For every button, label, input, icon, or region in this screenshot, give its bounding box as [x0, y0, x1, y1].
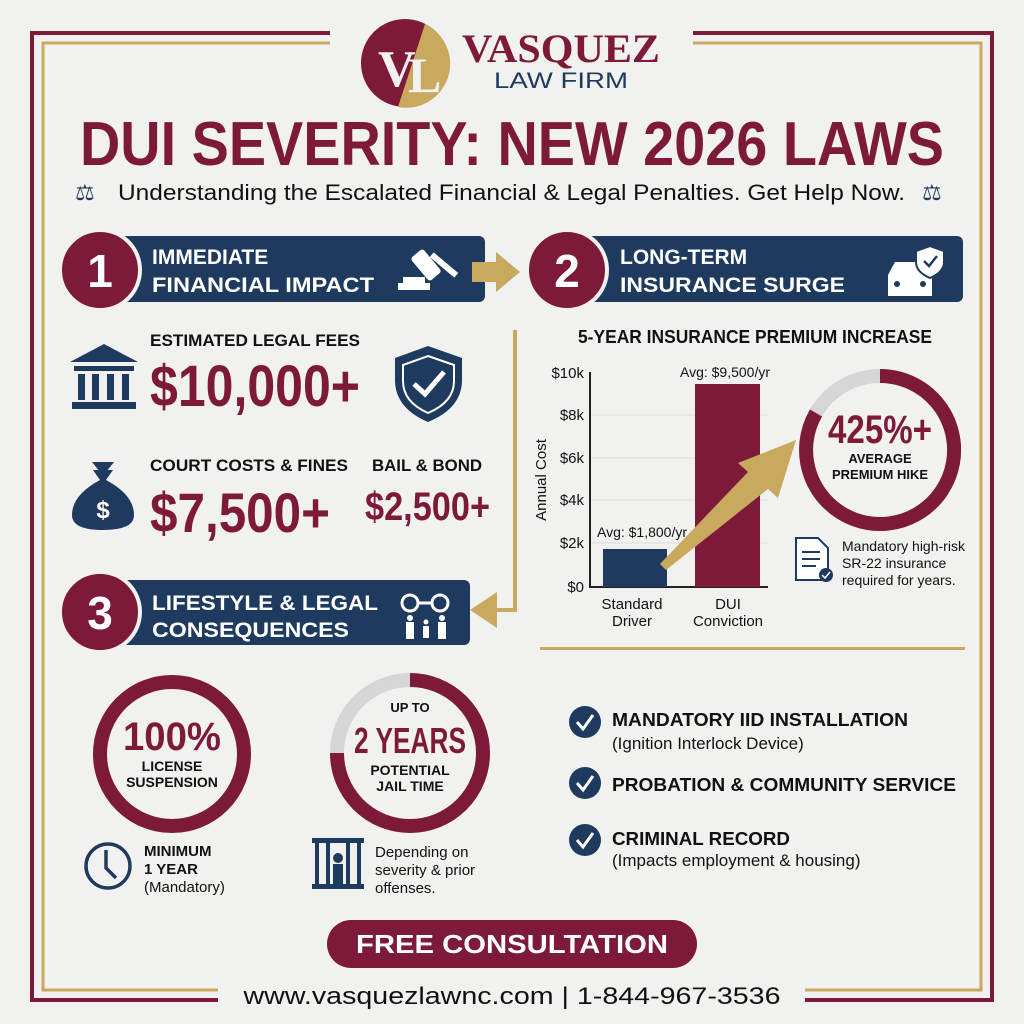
icon: document [796, 538, 833, 582]
header 3: CONSEQUENCES [152, 619, 349, 642]
header 1 [60, 230, 485, 310]
header 3: 3 [87, 587, 113, 639]
icon: car shield [888, 246, 944, 296]
header 2: 2 [554, 245, 580, 297]
item: probation: PROBATION & COMMUNITY SERVICE [612, 775, 956, 795]
SR-22 note: Mandatory high-risk [842, 538, 966, 554]
firm name: VASQUEZ [462, 26, 660, 71]
court costs block: $2,500+ [365, 485, 490, 529]
CTA button [327, 920, 697, 968]
bar chart: $10k [551, 365, 584, 382]
subtitle: ⚖ [75, 180, 95, 205]
bar chart: Conviction [693, 613, 763, 630]
circle stat: jail: JAIL TIME [376, 778, 444, 794]
header 1: IMMEDIATE [152, 246, 268, 269]
item: criminal record: (Impacts employment & housing) [612, 851, 860, 870]
donut: 425%: 425%+ [828, 408, 932, 452]
bar chart: Standard [602, 596, 662, 613]
icon: gavel [398, 248, 458, 290]
bar chart: Avg: $1,800/yr [597, 524, 687, 540]
bar chart: Avg: $9,500/yr [680, 364, 770, 380]
icon: money bag [72, 462, 134, 530]
header 2: INSURANCE SURGE [620, 274, 845, 297]
header 3 [60, 572, 470, 652]
circle stat: jail: 2 YEARS [354, 720, 466, 761]
header 1: FINANCIAL IMPACT [152, 274, 374, 297]
footer contact: www.vasquezlawnc.com | 1-844-967-3536 [242, 983, 780, 1010]
arrow 1 to 2 [472, 252, 520, 292]
SR-22 note [796, 538, 966, 588]
arrow: growth [660, 440, 796, 570]
license note: (Mandatory) [144, 879, 225, 896]
circle stat: jail [337, 680, 483, 826]
license note: 1 YEAR [144, 861, 198, 878]
legal fees block: ESTIMATED LEGAL FEES [150, 331, 360, 350]
bar chart: $6k [560, 450, 584, 467]
donut: 425% [806, 376, 954, 524]
jail note: Depending on [375, 844, 468, 861]
bar chart: $4k [560, 492, 584, 509]
bar chart: Driver [612, 613, 652, 630]
SR-22 note: required for years. [842, 572, 956, 588]
bar chart [533, 327, 932, 630]
SR-22 note: SR-22 insurance [842, 555, 946, 571]
jail note: severity & prior [375, 862, 475, 879]
circle stat: jail: POTENTIAL [370, 762, 450, 778]
logo emblem: V [378, 41, 416, 98]
subtitle: ⚖ [922, 180, 942, 205]
legal fees block: $10,000+ [150, 354, 360, 419]
item: criminal record: CRIMINAL RECORD [612, 829, 790, 849]
donut: 425%: PREMIUM HIKE [832, 467, 928, 482]
header 2 [527, 230, 963, 310]
connector arrow 2 to 3 [470, 330, 517, 628]
icon: jail bars [312, 838, 364, 889]
logo emblem: L [408, 47, 441, 103]
icon: shield [395, 346, 462, 422]
header 3: LIFESTYLE & LEGAL [152, 592, 378, 615]
checklist [569, 706, 956, 870]
logo emblem [361, 19, 450, 108]
icon: money bag: $ [96, 497, 110, 524]
item: criminal record [569, 824, 860, 870]
bar chart: 5-YEAR INSURANCE PREMIUM INCREASE [578, 327, 932, 347]
bar chart: $0 [567, 579, 584, 596]
item: IID [569, 706, 908, 753]
circle stat: license [100, 682, 244, 826]
court costs block: BAIL & BOND [372, 456, 482, 475]
circle stat: license: LICENSE [142, 758, 202, 774]
bar chart: Annual Cost [533, 438, 550, 521]
item: IID: (Ignition Interlock Device) [612, 734, 804, 753]
icon: handcuffs and family [402, 595, 448, 639]
bar chart: $2k [560, 535, 584, 552]
court costs block: COURT COSTS & FINES [150, 456, 348, 475]
circle stat: license: SUSPENSION [126, 774, 218, 790]
circle stat: jail: UP TO [390, 700, 430, 715]
license note [86, 843, 225, 896]
header 2: LONG-TERM [620, 246, 747, 269]
icon: bank [70, 344, 138, 409]
court costs block: $7,500+ [150, 481, 330, 544]
bar chart: $8k [560, 407, 584, 424]
logo [361, 19, 660, 108]
donut: 425%: AVERAGE [848, 451, 912, 466]
circle stat: license: 100% [123, 715, 221, 759]
title: DUI SEVERITY: NEW 2026 LAWS [80, 110, 944, 179]
jail note: offenses. [375, 880, 436, 897]
header 1: 1 [87, 245, 113, 297]
icon: clock [86, 844, 130, 888]
item: IID: MANDATORY IID INSTALLATION [612, 710, 908, 730]
court costs block [72, 456, 490, 544]
logo: LAW FIRM [494, 68, 628, 93]
license note: MINIMUM [144, 843, 212, 860]
item: probation [569, 767, 956, 799]
bar chart: DUI [715, 596, 741, 613]
subtitle: Understanding the Escalated Financial & Legal Penalties. Get Help Now. [118, 180, 905, 205]
jail note [312, 838, 475, 897]
CTA button: FREE CONSULTATION [356, 929, 668, 959]
legal fees block [70, 331, 462, 422]
